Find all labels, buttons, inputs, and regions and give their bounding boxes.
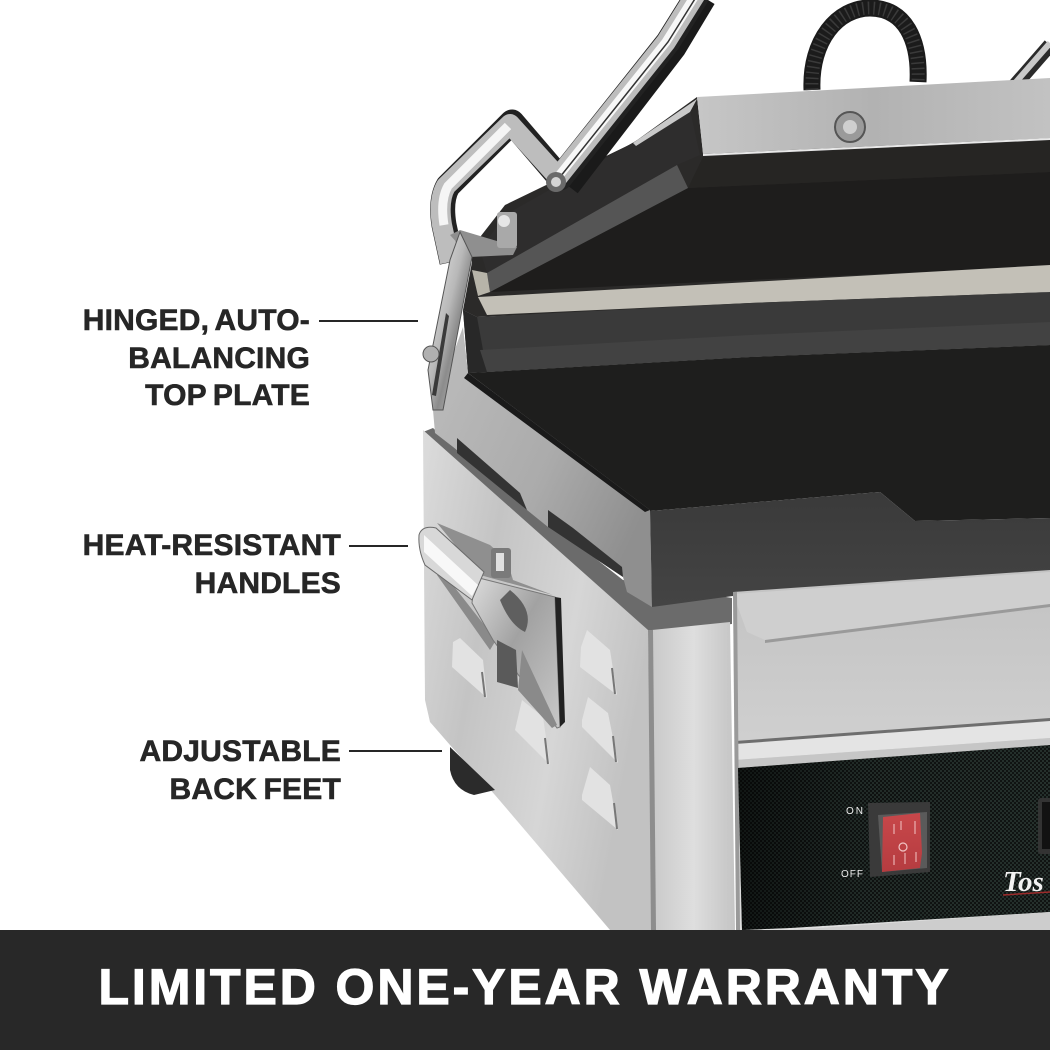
brand text: Tos bbox=[1003, 866, 1044, 898]
body rim bbox=[423, 428, 732, 632]
right handle wire bbox=[1009, 43, 1050, 92]
leader line: hinged top plate bbox=[319, 320, 418, 322]
control panel bbox=[738, 745, 1050, 930]
top plate casting bbox=[463, 97, 1050, 317]
side vents bbox=[452, 630, 618, 830]
side handle bbox=[419, 523, 565, 728]
body front bbox=[733, 570, 1050, 930]
body left side bbox=[423, 430, 652, 930]
label: handles bbox=[83, 529, 341, 600]
switch labels: ON bbox=[846, 806, 863, 817]
leader line: back feet bbox=[349, 750, 442, 752]
label: hinged top plate bbox=[83, 304, 310, 412]
label: handles: HEAT-RESISTANT bbox=[83, 529, 341, 562]
label: back feet: ADJUSTABLE bbox=[140, 735, 341, 768]
body corner bbox=[652, 622, 735, 930]
label: hinged top plate: TOP PLATE bbox=[145, 379, 310, 412]
bottom plate surface bbox=[468, 345, 1050, 521]
timer control bbox=[1038, 798, 1050, 854]
label: hinged top plate: HINGED, AUTO- bbox=[83, 304, 310, 337]
label: handles: HANDLES bbox=[195, 566, 341, 600]
warranty banner bbox=[0, 930, 1050, 1050]
label: back feet: BACK FEET bbox=[170, 772, 341, 806]
chrome upper handle bbox=[441, 0, 703, 262]
silver strip bbox=[478, 265, 1050, 315]
warranty banner: LIMITED ONE-YEAR WARRANTY bbox=[98, 959, 952, 1015]
label: back feet bbox=[140, 735, 341, 806]
silver casting band bbox=[433, 327, 652, 607]
label: hinged top plate: BALANCING bbox=[128, 342, 310, 374]
back foot bbox=[450, 747, 495, 795]
textured plate edge bbox=[463, 292, 1050, 373]
power switch bbox=[868, 802, 930, 877]
switch labels: OFF bbox=[841, 869, 863, 880]
left arm with bracket bbox=[423, 212, 517, 410]
switch labels bbox=[841, 806, 863, 880]
bottom plate front face bbox=[650, 492, 1050, 607]
power cable bbox=[812, 8, 918, 90]
back plate with screw bbox=[697, 78, 1050, 156]
leader line: handles bbox=[349, 545, 408, 546]
